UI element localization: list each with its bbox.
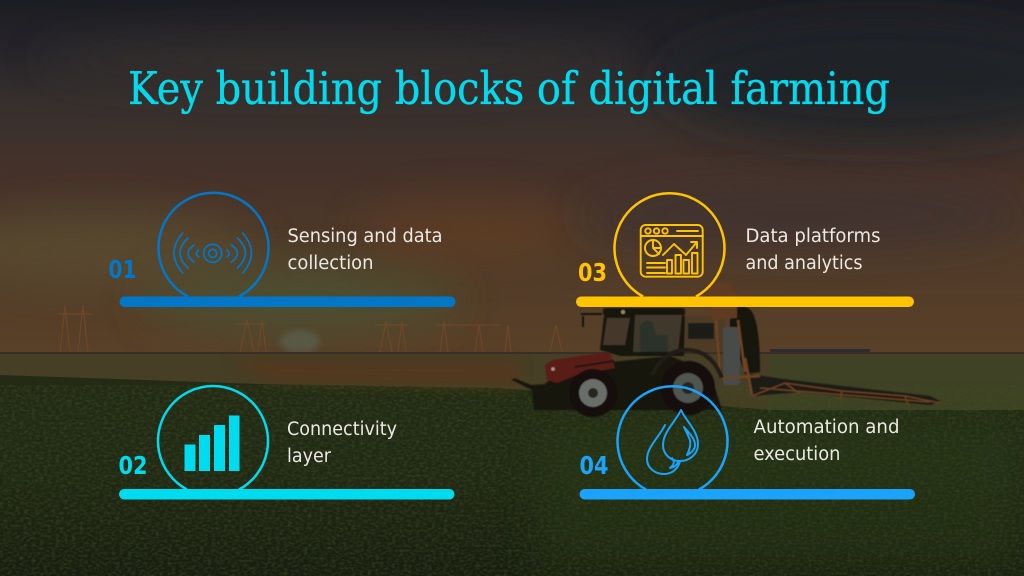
number 01: 01 xyxy=(108,255,136,284)
icon: analytics dashboard xyxy=(641,225,703,277)
bar 03 xyxy=(576,296,914,307)
circle 01 xyxy=(158,193,268,296)
number 02: 02 xyxy=(118,451,148,480)
circle 03 xyxy=(614,193,724,296)
icon: signal bars xyxy=(184,416,240,471)
label 01: Sensing and data xyxy=(288,226,442,247)
label 02: Connectivity xyxy=(287,419,397,440)
bar 02 xyxy=(119,489,454,500)
mirror xyxy=(581,314,602,327)
orange hopper and frame xyxy=(707,282,737,320)
item 04: automation and execution xyxy=(580,386,915,500)
circle 02 xyxy=(158,386,268,490)
dark rear arc xyxy=(730,306,760,374)
item 03: data platforms and analytics: and analytics xyxy=(746,253,862,274)
item 03: data platforms and analytics xyxy=(576,193,914,307)
title: Key building blocks of digital farming xyxy=(128,62,890,115)
item 01: sensing and data collection xyxy=(108,193,456,307)
red hood xyxy=(545,352,615,383)
sprayer boom xyxy=(750,374,940,405)
number 04: 04 xyxy=(580,451,608,480)
background photo: tractor with sprayer xyxy=(512,282,940,417)
tank xyxy=(723,327,740,385)
circle 04 xyxy=(617,386,727,490)
bar 04 xyxy=(580,489,915,500)
label 03: Data platforms xyxy=(746,226,880,247)
bar 01 xyxy=(120,296,456,307)
rear frame window xyxy=(685,316,725,352)
icon: sensor waves xyxy=(174,233,251,273)
background photo: sunset sky xyxy=(0,0,1024,356)
cab roof xyxy=(603,308,685,316)
tractor body xyxy=(532,356,722,410)
background photo: field xyxy=(0,349,1024,576)
label 04: Automation and xyxy=(754,417,900,438)
icon: water drops xyxy=(647,410,698,474)
number 03: 03 xyxy=(578,258,607,287)
item 04: automation and execution: execution xyxy=(754,444,840,465)
front linkage xyxy=(512,378,552,410)
front wheel xyxy=(569,369,617,417)
rear wheel xyxy=(652,350,722,415)
background photo: pylons on the horizon xyxy=(58,306,562,352)
item 02: connectivity layer xyxy=(118,386,454,500)
cab frame xyxy=(600,316,685,356)
cab windows xyxy=(603,318,630,345)
item 01: sensing and data collection: collection xyxy=(288,253,374,274)
item 02: connectivity layer: layer xyxy=(287,446,331,467)
